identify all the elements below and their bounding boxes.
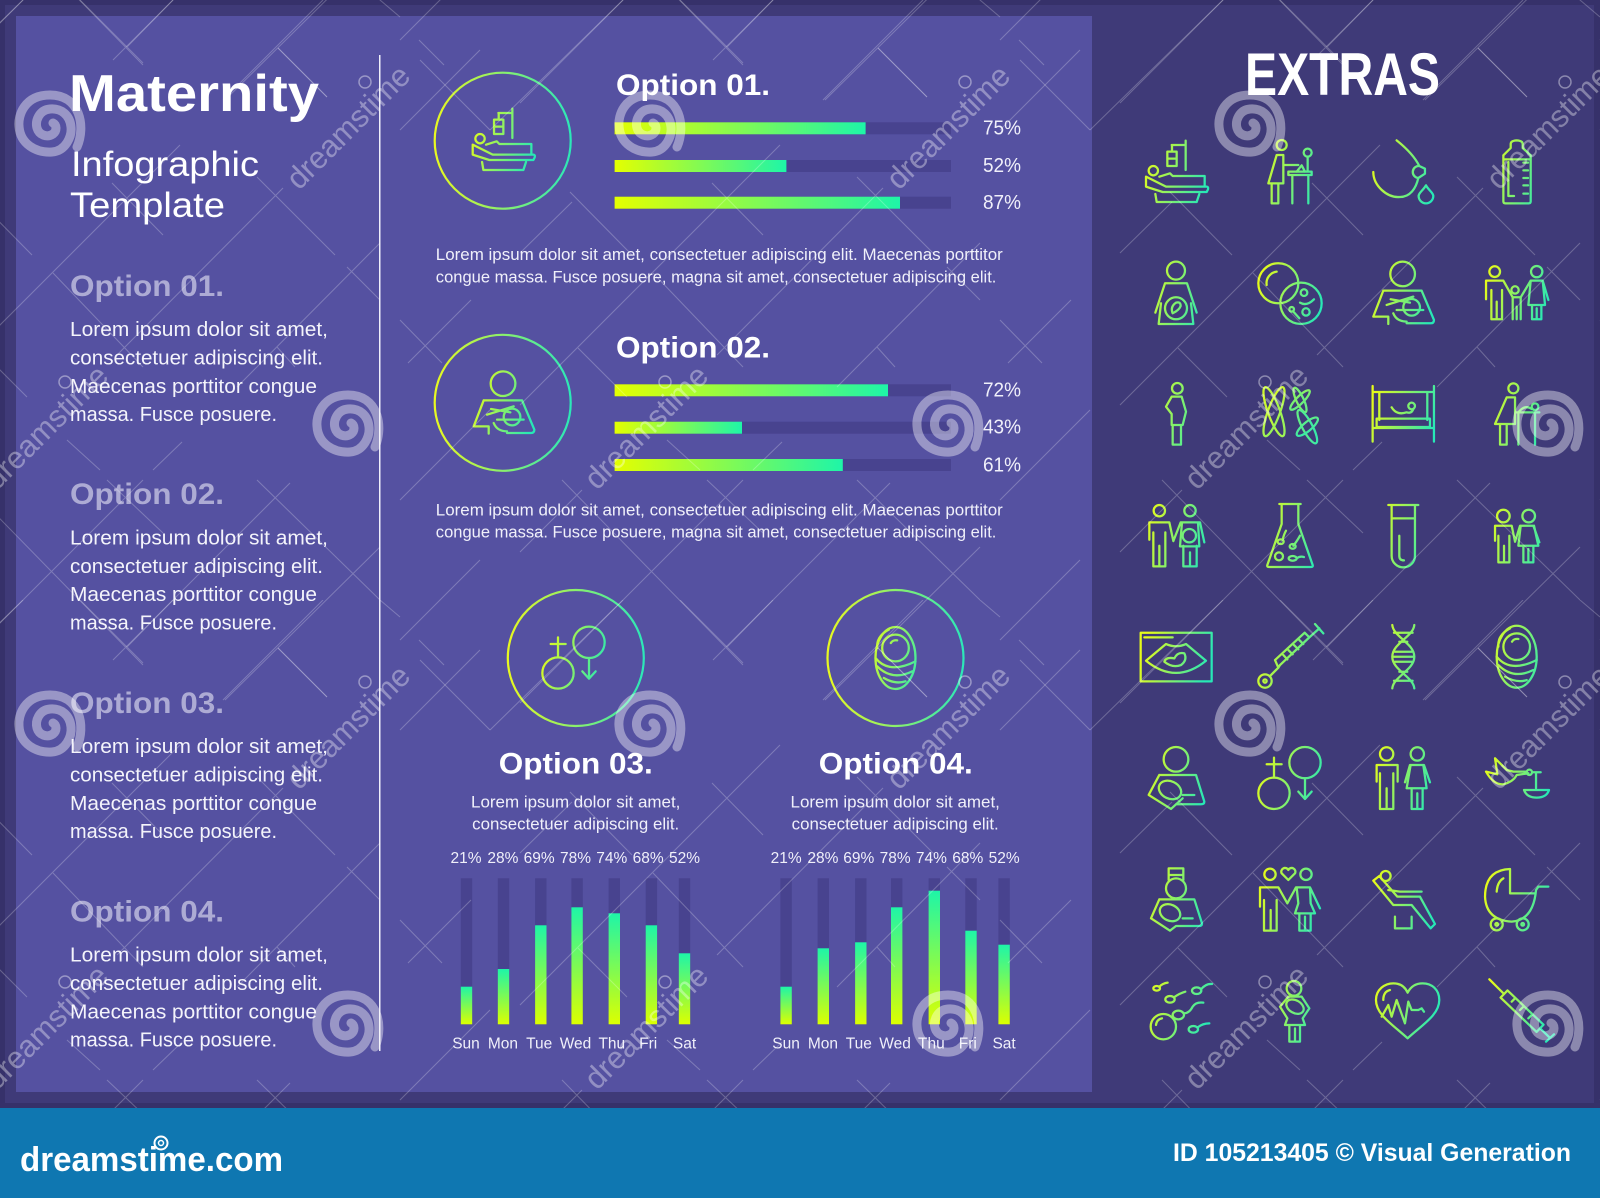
option 04 column chart: Thu	[918, 1035, 945, 1052]
left option 02: consectetuer adipiscing elit.	[70, 556, 323, 578]
option 03 column chart: Thu	[598, 1035, 625, 1052]
left option 02	[70, 478, 328, 634]
left option 02: Maecenas porttitor congue	[70, 584, 317, 606]
circle badge with bed icon	[435, 73, 571, 209]
progress bars: 61%	[983, 454, 1021, 476]
option 03 block	[450, 590, 700, 1052]
option 03 column chart: Fri	[639, 1035, 657, 1052]
left option 04: Option 04.	[70, 896, 224, 928]
icon: couple with heart	[1260, 868, 1320, 931]
left option 03: consectetuer adipiscing elit.	[70, 765, 323, 787]
icon: breast milk drop	[1373, 140, 1433, 203]
option 04 column chart: 21%	[771, 850, 802, 867]
extras icon grid	[1141, 41, 1554, 1042]
icon: chromosomes	[1259, 385, 1321, 445]
option 03 column chart: Sun	[452, 1035, 480, 1052]
icon: mother and changing table	[1268, 140, 1312, 203]
icon: hospital bed	[1146, 141, 1208, 202]
circle badge with gender icon	[508, 590, 644, 726]
watermark overlay: dreamstime	[1177, 958, 1315, 1096]
option 04 column chart: Fri	[959, 1035, 977, 1052]
option 04 column chart: Sat	[992, 1035, 1016, 1052]
left option 01	[70, 270, 328, 426]
option 03 column chart: Mon	[488, 1035, 518, 1052]
icon: fetus in belly	[1155, 262, 1197, 324]
option 02 block	[435, 332, 1021, 542]
icon: mother bathing baby	[1495, 383, 1539, 445]
icon: egg and cells	[1258, 263, 1322, 324]
option 03 description: consectetuer adipiscing elit.	[472, 815, 679, 833]
icon: parent holding baby	[1149, 747, 1204, 809]
icon: pregnant woman profile	[1166, 383, 1186, 445]
subtitle	[70, 145, 259, 225]
option 03 column chart: Tue	[526, 1035, 552, 1052]
icon: insemination syringe	[1258, 624, 1323, 688]
icon: DNA helix	[1392, 625, 1414, 688]
option 03 description	[471, 793, 680, 833]
left option 01: consectetuer adipiscing elit.	[70, 347, 323, 369]
option 04 column chart: Tue	[846, 1035, 872, 1052]
progress bars	[615, 118, 1021, 214]
option 03 column chart: 69%	[524, 850, 555, 867]
option 02 heading: Option 02.	[616, 332, 770, 364]
icon: nurse with baby	[1151, 868, 1202, 931]
icon: incubator crib	[1373, 386, 1434, 442]
option 04 column chart: Mon	[808, 1035, 838, 1052]
extras heading: EXTRAS	[1245, 41, 1440, 108]
option 01 description	[436, 246, 1003, 286]
icon: swaddled newborn	[1497, 626, 1537, 688]
option 03 column chart: 68%	[633, 850, 664, 867]
option 03 column chart: 78%	[560, 850, 591, 867]
option 01 description: Lorem ipsum dolor sit amet, consectetuer adipiscing elit. Maecenas porttitor	[436, 246, 1003, 264]
option 04 description: consectetuer adipiscing elit.	[792, 815, 999, 833]
option 04 column chart: 68%	[952, 850, 984, 867]
option 03 column chart: 21%	[450, 850, 482, 867]
icon: stork with bundle	[1486, 758, 1549, 798]
image credit: ID 105213405 © Visual Generation	[1173, 1139, 1571, 1167]
subtitle: Infographic	[71, 145, 259, 184]
icon: ultrasound screen	[1141, 633, 1212, 681]
progress bars: 72%	[983, 380, 1021, 402]
option 03 column chart: 74%	[596, 850, 628, 867]
icon: flask with sperm	[1267, 504, 1313, 567]
left option 01: Lorem ipsum dolor sit amet,	[70, 319, 328, 341]
option 03 column chart: 52%	[669, 850, 700, 867]
subtitle: Template	[70, 186, 225, 225]
option 03 heading: Option 03.	[499, 747, 653, 780]
icon: family with child	[1486, 266, 1548, 319]
option 04 column chart: 78%	[880, 850, 911, 867]
watermark overlay: dreamstime	[577, 358, 715, 496]
icon: reclining chair	[1373, 871, 1435, 928]
left option 01: Option 01.	[70, 270, 224, 303]
left option 04: massa. Fusce posuere.	[70, 1030, 277, 1052]
left option 04: Maecenas porttitor congue	[70, 1001, 317, 1023]
option 03 column chart	[450, 850, 700, 1052]
option 02 description	[436, 502, 1003, 542]
left option 04: Lorem ipsum dolor sit amet,	[70, 944, 328, 966]
icon: sperm and egg	[1151, 983, 1212, 1039]
icon: heart with pulse	[1376, 983, 1439, 1038]
option 02 description: Lorem ipsum dolor sit amet, consectetuer adipiscing elit. Maecenas porttitor	[436, 502, 1003, 520]
left option 03: Maecenas porttitor congue	[70, 793, 317, 815]
option 04 column chart: 28%	[807, 850, 839, 867]
option 03 description: Lorem ipsum dolor sit amet,	[471, 793, 680, 811]
option 04 column chart: 52%	[989, 850, 1020, 867]
option 04 column chart: 69%	[843, 850, 875, 867]
option 04 column chart: Sun	[772, 1035, 800, 1052]
option 04 column chart	[771, 850, 1020, 1052]
icon: man and woman	[1377, 747, 1430, 809]
option 01 description: congue massa. Fusce posuere, magna sit amet, consectetuer adipiscing elit.	[436, 268, 996, 286]
progress bars: 75%	[983, 118, 1021, 140]
progress bars: 43%	[983, 417, 1021, 439]
progress bars	[615, 380, 1021, 476]
option 03 column chart: 28%	[487, 850, 519, 867]
dreamstime logo: dreamstime.com	[20, 1141, 283, 1179]
left option 03	[70, 687, 328, 843]
progress bars: 52%	[983, 155, 1021, 177]
left option 02: Option 02.	[70, 478, 224, 511]
icon: baby bottle	[1503, 140, 1531, 203]
left option 01: Maecenas porttitor congue	[70, 376, 317, 398]
watermark overlay: dreamstime	[279, 58, 417, 196]
circle badge with nursing icon	[435, 335, 571, 471]
option 01 block	[435, 69, 1021, 286]
option 03 column chart: Sat	[673, 1035, 697, 1052]
option 03 column chart: Wed	[560, 1035, 591, 1052]
icon: mother nursing baby	[1373, 262, 1434, 324]
option 04 heading: Option 04.	[819, 747, 973, 780]
left option 02: massa. Fusce posuere.	[70, 612, 277, 634]
option 04 column chart: 74%	[916, 850, 947, 867]
watermark overlay: dreamstime	[577, 958, 715, 1096]
option 02 description: congue massa. Fusce posuere, magna sit amet, consectetuer adipiscing elit.	[436, 524, 996, 542]
left option 04	[70, 896, 328, 1052]
watermark overlay: dreamstime	[279, 658, 417, 796]
icon: gender symbols	[1258, 747, 1321, 809]
watermark overlay: dreamstime	[1177, 358, 1315, 496]
icon: couple pregnant	[1149, 505, 1204, 566]
icon: couple holding hands	[1495, 510, 1539, 562]
watermark overlay: dreamstime	[879, 658, 1017, 796]
progress bars: 87%	[983, 192, 1021, 214]
option 04 description: Lorem ipsum dolor sit amet,	[790, 793, 1000, 811]
left option 01: massa. Fusce posuere.	[70, 404, 277, 426]
watermark overlay: dreamstime	[879, 58, 1017, 196]
icon: test tube	[1388, 505, 1418, 567]
icon: downward syringe	[1489, 979, 1554, 1042]
option 01 heading: Option 01.	[616, 69, 770, 102]
left option 03: massa. Fusce posuere.	[70, 821, 277, 843]
option 04 block	[771, 590, 1020, 1052]
icon: baby pram	[1485, 869, 1548, 930]
left option 04: consectetuer adipiscing elit.	[70, 973, 323, 995]
left option 03: Lorem ipsum dolor sit amet,	[70, 736, 328, 758]
option 04 column chart: Wed	[879, 1035, 911, 1052]
left option 02: Lorem ipsum dolor sit amet,	[70, 527, 328, 549]
title: Maternity	[69, 65, 319, 123]
icon: mother cradling baby	[1280, 981, 1309, 1042]
circle badge with newborn icon	[828, 590, 964, 726]
option 04 description	[790, 793, 1000, 833]
main panel	[16, 16, 1092, 1092]
left column	[69, 65, 328, 1052]
footer banner	[0, 1108, 1600, 1198]
left option 03: Option 03.	[70, 687, 224, 720]
